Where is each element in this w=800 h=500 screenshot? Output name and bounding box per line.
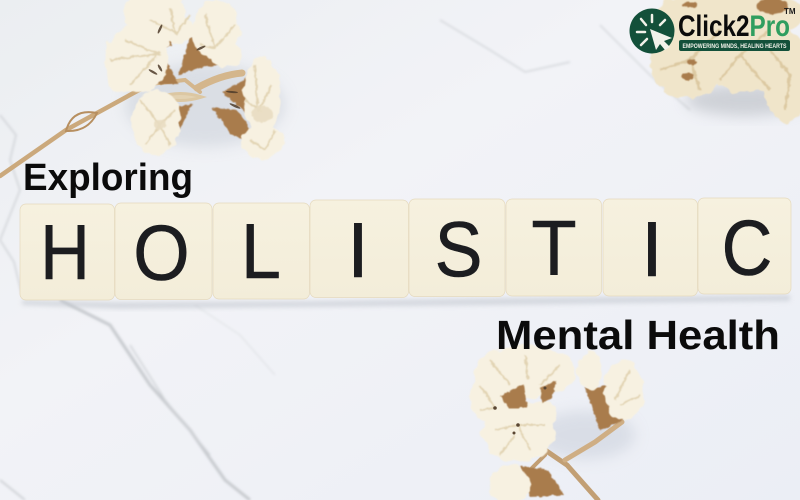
stem: [0, 73, 242, 176]
letter tile: C: [698, 198, 791, 294]
letter tile: O: O: [133, 209, 190, 296]
logo: Click2Pro: [630, 7, 796, 54]
letter tile: I: I: [641, 205, 663, 293]
letter tile: H: [20, 204, 114, 300]
petal creases: [480, 355, 640, 455]
letter tile: L: L: [241, 207, 281, 295]
flowers top-right: [650, 0, 800, 122]
letter tile: O: [115, 203, 212, 300]
petal creases: [110, 8, 275, 150]
heading: Exploring: Exploring: [23, 157, 193, 199]
tagline banner: [679, 40, 790, 51]
icon: cursor badge: [630, 8, 674, 54]
letter tile: C: C: [722, 204, 772, 291]
trademark: TM: [784, 7, 796, 16]
letter tile: T: [506, 199, 602, 296]
letter tile: S: [409, 199, 505, 296]
letter tile: S: S: [435, 205, 482, 293]
letter tile: H: H: [40, 208, 90, 296]
letter tile: I: [603, 199, 698, 296]
letter tile: L: [213, 203, 310, 299]
letter tile: I: [310, 200, 408, 298]
stems: [530, 422, 622, 500]
heading: Mental Health: Mental Health: [496, 312, 780, 358]
petal creases: [660, 30, 790, 110]
letter tile: T: T: [531, 205, 577, 292]
flowers top-left: [0, 0, 285, 176]
wordmark: Click2Pro: [678, 10, 790, 43]
tile shadow: [22, 295, 790, 309]
petals: [104, 0, 283, 159]
calyces: [140, 22, 258, 142]
flowers bottom: [470, 346, 644, 500]
letter tile: I: I: [347, 206, 369, 294]
